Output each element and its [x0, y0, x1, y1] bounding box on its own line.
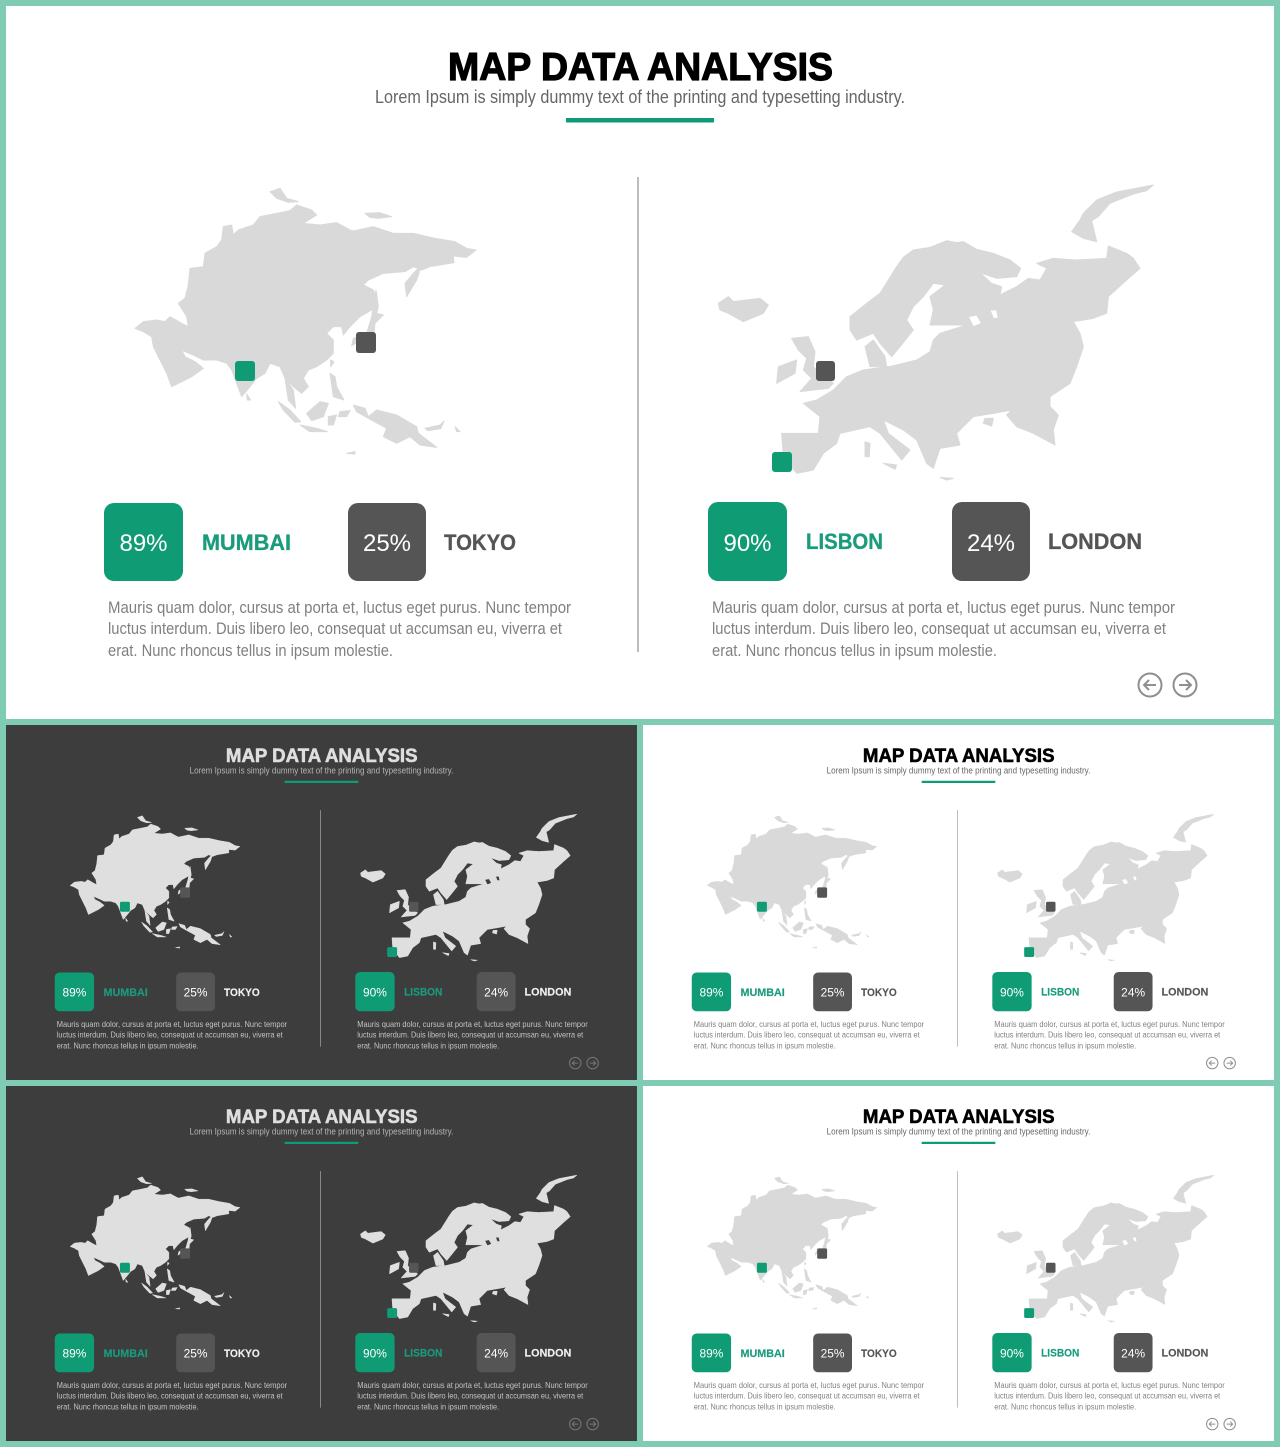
text block: right description: Mauris quam dolor, cursus at porta et, luctus eget purus. Nunc tempor — [994, 1381, 1225, 1390]
marker: Lisbon — [1024, 947, 1034, 957]
stat: Mumbai 89% — [55, 972, 148, 1011]
marker: London — [816, 361, 835, 381]
subtitle: Lorem Ipsum is simply dummy text of the printing and typesetting industry. — [827, 765, 1090, 775]
stat: Mumbai 89%: 89% — [62, 985, 87, 999]
text block: left description — [694, 1020, 924, 1051]
icon: next arrow — [587, 1418, 598, 1430]
text block: right description: erat. Nunc rhoncus tellus in ipsum molestie. — [357, 1403, 499, 1412]
map: Asia — [70, 816, 240, 948]
marker: London — [409, 902, 419, 912]
subtitle: Lorem Ipsum is simply dummy text of the printing and typesetting industry. — [190, 765, 453, 775]
stat: Mumbai 89% — [55, 1333, 148, 1372]
stat: London 24% — [1114, 972, 1208, 1011]
stat: London 24% — [477, 1333, 571, 1372]
stat: London 24%: 24% — [1121, 1346, 1145, 1360]
stat: London 24% — [952, 502, 1142, 581]
marker: London — [409, 1263, 419, 1273]
text block: left description: luctus interdum. Duis libero leo, consequat ut accumsan eu, viverra et — [57, 1031, 283, 1040]
stat: Lisbon 90%: LISBON — [1041, 1347, 1079, 1359]
text block: left description — [694, 1381, 924, 1412]
stat: Lisbon 90%: LISBON — [806, 529, 883, 554]
text block: left description — [57, 1381, 287, 1412]
stat: Tokyo 25%: TOKYO — [224, 1348, 260, 1360]
icon: previous arrow — [570, 1057, 581, 1069]
icon: previous arrow — [1207, 1057, 1218, 1069]
stat: London 24% — [1114, 1333, 1208, 1372]
stat: Tokyo 25%: TOKYO — [861, 1348, 897, 1360]
stat: Mumbai 89%: 89% — [62, 1346, 87, 1360]
text block: right description — [357, 1020, 588, 1051]
title: MAP DATA ANALYSIS — [863, 1106, 1055, 1128]
text block: left description: Mauris quam dolor, cursus at porta et, luctus eget purus. Nunc tempor — [694, 1020, 924, 1029]
title underline — [285, 1142, 358, 1144]
text block: right description: erat. Nunc rhoncus tellus in ipsum molestie. — [994, 1042, 1136, 1051]
text block: right description: luctus interdum. Duis libero leo, consequat ut accumsan eu, viverra et — [357, 1031, 584, 1040]
text block: right description: luctus interdum. Duis libero leo, consequat ut accumsan eu, viverra et — [357, 1392, 584, 1401]
text block: right description — [712, 599, 1175, 660]
text block: left description: erat. Nunc rhoncus tellus in ipsum molestie. — [108, 642, 393, 660]
stat: Tokyo 25%: 25% — [363, 530, 411, 557]
stat: Mumbai 89%: MUMBAI — [202, 530, 291, 555]
text block: right description: luctus interdum. Duis libero leo, consequat ut accumsan eu, viverra et — [994, 1392, 1221, 1401]
text block: right description: erat. Nunc rhoncus tellus in ipsum molestie. — [712, 642, 997, 660]
marker: Lisbon — [1024, 1308, 1034, 1318]
stat: London 24% — [477, 972, 571, 1011]
title: MAP DATA ANALYSIS — [863, 745, 1055, 767]
text block: left description: luctus interdum. Duis libero leo, consequat ut accumsan eu, viverra et — [108, 620, 562, 638]
stat: Tokyo 25% — [176, 972, 260, 1011]
stat: Mumbai 89%: MUMBAI — [104, 987, 148, 999]
panel: light slide, row 2 — [643, 725, 1274, 1080]
stat: London 24%: 24% — [484, 985, 508, 999]
map: Asia — [135, 188, 476, 454]
stat: Tokyo 25% — [813, 972, 897, 1011]
text block: left description: erat. Nunc rhoncus tellus in ipsum molestie. — [57, 1042, 199, 1051]
stat: Tokyo 25%: 25% — [184, 985, 208, 999]
title underline — [922, 1142, 995, 1144]
map: Asia — [707, 1177, 877, 1309]
stat: Mumbai 89% — [692, 1333, 785, 1372]
marker: Mumbai — [757, 902, 767, 912]
text block: left description: erat. Nunc rhoncus tellus in ipsum molestie. — [694, 1042, 836, 1051]
map: Asia — [70, 1177, 240, 1309]
title underline — [922, 781, 995, 783]
text block: right description — [357, 1381, 588, 1412]
stat: Mumbai 89%: 89% — [119, 530, 168, 557]
text block: right description: erat. Nunc rhoncus tellus in ipsum molestie. — [357, 1042, 499, 1051]
text block: right description: luctus interdum. Duis libero leo, consequat ut accumsan eu, viverra et — [994, 1031, 1221, 1040]
title: MAP DATA ANALYSIS — [226, 1106, 418, 1128]
map: Europe — [360, 1175, 577, 1322]
icon: next arrow — [1224, 1418, 1235, 1430]
stat: London 24%: LONDON — [1161, 1347, 1208, 1359]
text block: left description: Mauris quam dolor, cursus at porta et, luctus eget purus. Nunc tempor — [57, 1020, 287, 1029]
stat: Tokyo 25%: 25% — [184, 1346, 208, 1360]
panel: main slide — [6, 6, 1274, 719]
marker: Mumbai — [235, 361, 255, 381]
stat: Lisbon 90%: 90% — [1000, 1346, 1024, 1360]
stat: Tokyo 25%: TOKYO — [444, 530, 516, 555]
marker: Mumbai — [120, 902, 130, 912]
stat: Tokyo 25% — [348, 503, 516, 581]
stat: Lisbon 90% — [355, 1333, 442, 1372]
text block: left description: luctus interdum. Duis libero leo, consequat ut accumsan eu, viverra et — [694, 1031, 920, 1040]
text block: left description — [108, 599, 571, 660]
text block: left description: erat. Nunc rhoncus tellus in ipsum molestie. — [57, 1403, 199, 1412]
map: Europe — [997, 814, 1214, 961]
text block: left description — [57, 1020, 287, 1051]
title: MAP DATA ANALYSIS — [226, 745, 418, 767]
marker: Tokyo — [817, 887, 827, 898]
marker: Tokyo — [356, 332, 376, 353]
marker: London — [1046, 1263, 1056, 1273]
stat: Lisbon 90%: LISBON — [1041, 986, 1079, 998]
text block: right description — [994, 1020, 1225, 1051]
marker: Lisbon — [387, 1308, 397, 1318]
icon: next arrow — [1224, 1057, 1235, 1069]
title underline — [566, 118, 714, 122]
text block: left description: Mauris quam dolor, cursus at porta et, luctus eget purus. Nunc tempor — [108, 599, 571, 617]
text block: right description — [994, 1381, 1225, 1412]
stat: London 24%: 24% — [1121, 985, 1145, 999]
stat: Tokyo 25%: 25% — [821, 985, 845, 999]
icon: previous arrow — [1207, 1418, 1218, 1430]
stat: Tokyo 25%: 25% — [821, 1346, 845, 1360]
stat: London 24%: 24% — [967, 530, 1015, 557]
title underline — [285, 781, 358, 783]
text block: left description: Mauris quam dolor, cursus at porta et, luctus eget purus. Nunc tempor — [57, 1381, 287, 1390]
stat: Tokyo 25%: TOKYO — [224, 987, 260, 999]
marker: London — [1046, 902, 1056, 912]
marker: Lisbon — [387, 947, 397, 957]
stat: Tokyo 25% — [813, 1333, 897, 1372]
text block: right description: Mauris quam dolor, cursus at porta et, luctus eget purus. Nunc tempor — [712, 599, 1175, 617]
panel: dark slide, row 3 — [6, 1086, 637, 1441]
stat: London 24%: LONDON — [1048, 529, 1142, 554]
icon: next arrow — [1174, 674, 1196, 696]
text block: left description: luctus interdum. Duis libero leo, consequat ut accumsan eu, viverra et — [57, 1392, 283, 1401]
text block: left description: Mauris quam dolor, cursus at porta et, luctus eget purus. Nunc tempor — [694, 1381, 924, 1390]
stat: Mumbai 89%: 89% — [699, 985, 724, 999]
stat: Lisbon 90% — [708, 502, 883, 581]
stat: Lisbon 90%: 90% — [723, 530, 772, 557]
text block: right description: Mauris quam dolor, cursus at porta et, luctus eget purus. Nunc tempor — [994, 1020, 1225, 1029]
icon: previous arrow — [1138, 674, 1162, 696]
text block: right description: erat. Nunc rhoncus tellus in ipsum molestie. — [994, 1403, 1136, 1412]
stat: London 24%: 24% — [484, 1346, 508, 1360]
stat: London 24%: LONDON — [524, 986, 571, 998]
stat: Lisbon 90%: 90% — [1000, 985, 1024, 999]
stat: Lisbon 90% — [992, 1333, 1079, 1372]
marker: Mumbai — [757, 1263, 767, 1273]
marker: Tokyo — [817, 1248, 827, 1259]
stat: Lisbon 90% — [992, 972, 1079, 1011]
map: Europe — [360, 814, 577, 961]
stat: Mumbai 89% — [692, 972, 785, 1011]
stat: Mumbai 89%: MUMBAI — [741, 987, 785, 999]
icon: previous arrow — [570, 1418, 581, 1430]
stat: Tokyo 25% — [176, 1333, 260, 1372]
icon: next arrow — [587, 1057, 598, 1069]
title: MAP DATA ANALYSIS — [448, 46, 833, 89]
marker: Lisbon — [772, 452, 792, 472]
stat: Mumbai 89%: MUMBAI — [741, 1348, 785, 1360]
stat: Lisbon 90%: LISBON — [404, 1347, 442, 1359]
text block: right description: Mauris quam dolor, cursus at porta et, luctus eget purus. Nunc tempor — [357, 1020, 588, 1029]
map: Europe — [997, 1175, 1214, 1322]
stat: Mumbai 89%: MUMBAI — [104, 1348, 148, 1360]
stat: Mumbai 89%: 89% — [699, 1346, 724, 1360]
text block: right description: Mauris quam dolor, cursus at porta et, luctus eget purus. Nunc tempor — [357, 1381, 588, 1390]
panel: light slide, row 3 — [643, 1086, 1274, 1441]
stat: Lisbon 90%: 90% — [363, 985, 387, 999]
stat: Lisbon 90%: LISBON — [404, 986, 442, 998]
map: Europe — [718, 185, 1153, 480]
subtitle: Lorem Ipsum is simply dummy text of the printing and typesetting industry. — [190, 1126, 453, 1136]
subtitle: Lorem Ipsum is simply dummy text of the printing and typesetting industry. — [375, 87, 905, 107]
panel: dark slide, row 2 — [6, 725, 637, 1080]
stat: Tokyo 25%: TOKYO — [861, 987, 897, 999]
stat: Mumbai 89% — [104, 503, 291, 581]
marker: Tokyo — [180, 887, 190, 898]
subtitle: Lorem Ipsum is simply dummy text of the printing and typesetting industry. — [827, 1126, 1090, 1136]
text block: left description: erat. Nunc rhoncus tellus in ipsum molestie. — [694, 1403, 836, 1412]
stat: Lisbon 90% — [355, 972, 442, 1011]
stat: Lisbon 90%: 90% — [363, 1346, 387, 1360]
stat: London 24%: LONDON — [524, 1347, 571, 1359]
text block: left description: luctus interdum. Duis libero leo, consequat ut accumsan eu, viverra et — [694, 1392, 920, 1401]
stat: London 24%: LONDON — [1161, 986, 1208, 998]
marker: Mumbai — [120, 1263, 130, 1273]
text block: right description: luctus interdum. Duis libero leo, consequat ut accumsan eu, viverra et — [712, 620, 1166, 638]
marker: Tokyo — [180, 1248, 190, 1259]
map: Asia — [707, 816, 877, 948]
